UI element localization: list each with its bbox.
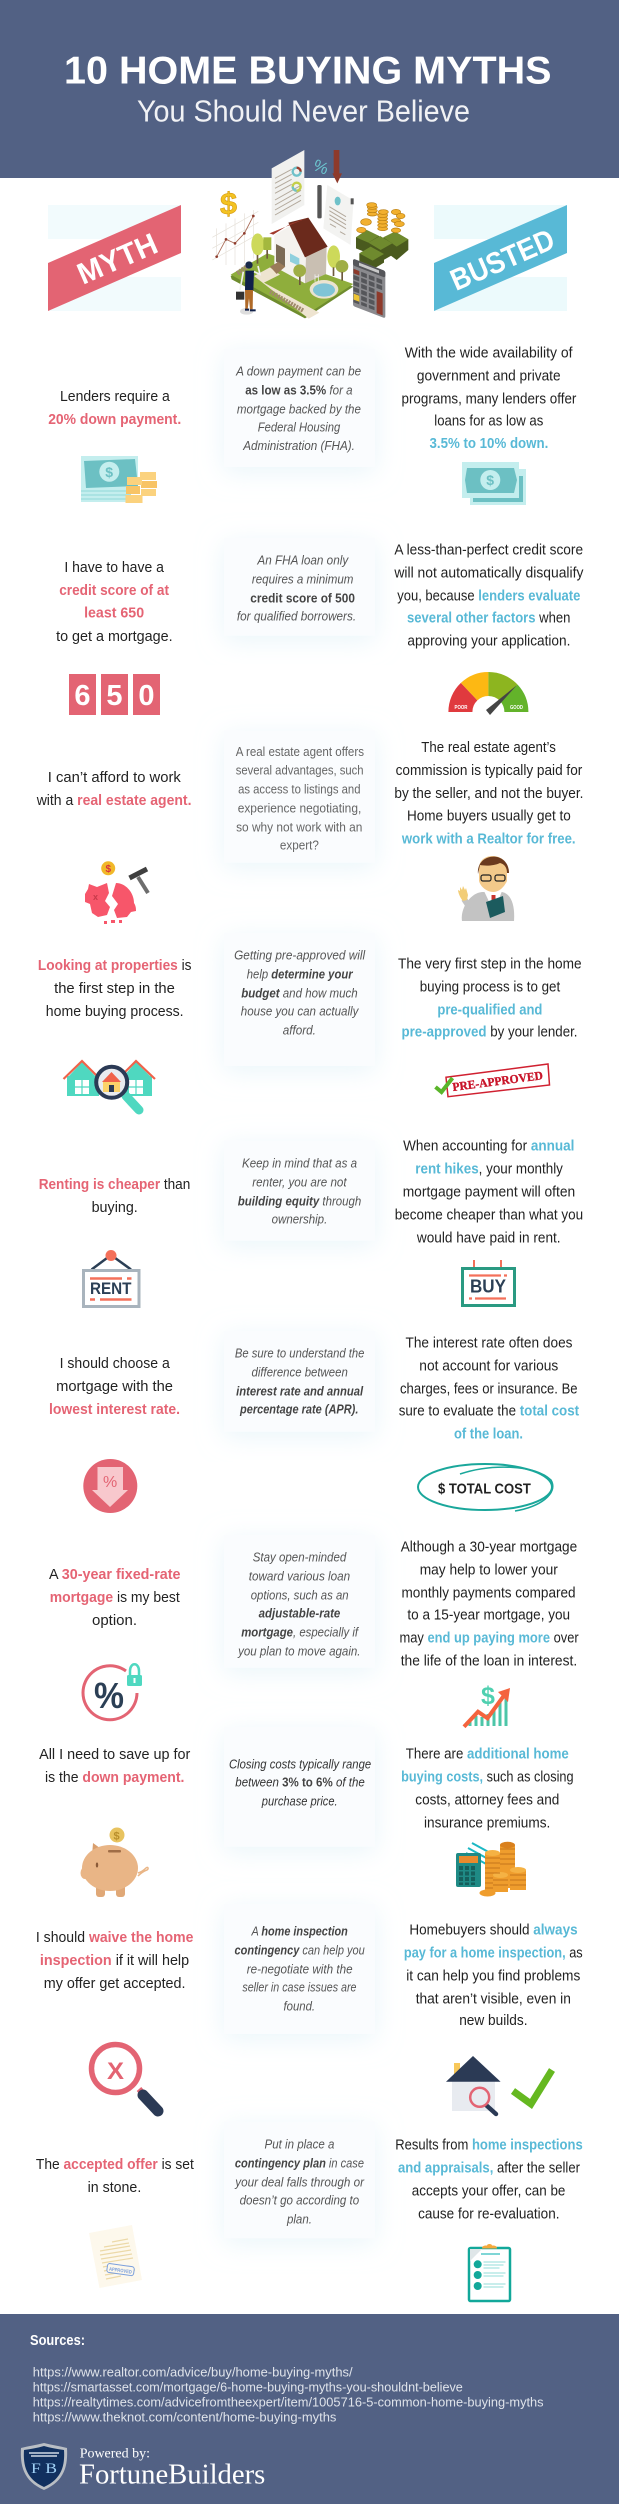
card 9: contingency can help you bbox=[234, 1943, 365, 1957]
icon: piggy bank: $ bbox=[114, 1830, 120, 1842]
busted 7 text bbox=[400, 1538, 579, 1669]
row 1 bbox=[48, 344, 576, 505]
icon: cash and coins: $ bbox=[105, 464, 113, 480]
row 10 bbox=[36, 2122, 583, 2301]
card 1: mortgage backed by the bbox=[237, 402, 361, 416]
icon: piggy bank bbox=[80, 1828, 148, 1897]
card 9: seller in case issues are bbox=[242, 1980, 357, 1994]
sources list: https://realtytimes.com/advicefromtheexpert/item/1005716-5-common-home-buying-myths bbox=[33, 2395, 544, 2410]
busted 7 text: monthly payments compared bbox=[402, 1584, 576, 1601]
busted 8 text: There are additional home bbox=[406, 1745, 569, 1762]
myth 4 text: Looking at properties is bbox=[38, 957, 192, 974]
busted 6 text: sure to evaluate the total cost bbox=[399, 1402, 579, 1419]
myth 8 text: All I need to save up for bbox=[39, 1746, 190, 1763]
icon: magnifier with x bbox=[92, 2044, 158, 2111]
card 2: requires a minimum bbox=[252, 572, 353, 586]
busted 7 text: Although a 30-year mortgage bbox=[401, 1538, 577, 1555]
house illustration bbox=[212, 150, 408, 319]
myth 2 text: to get a mortgage. bbox=[56, 628, 173, 645]
myth 2 text bbox=[56, 559, 173, 645]
card 8: purchase price. bbox=[261, 1794, 338, 1808]
busted 9 text: Homebuyers should always bbox=[409, 1921, 578, 1938]
busted label bbox=[434, 205, 567, 311]
busted 1 text: programs, many lenders offer bbox=[402, 390, 576, 407]
card 9: re-negotiate with the bbox=[247, 1962, 353, 1976]
myth 3 text: I can’t afford to work bbox=[48, 769, 181, 786]
myth 9 text bbox=[36, 1929, 193, 1992]
row 7 bbox=[49, 1535, 579, 1727]
card 3: expert? bbox=[280, 838, 319, 852]
myth 5 text: Renting is cheaper than bbox=[39, 1176, 190, 1193]
busted 6 text: charges, fees or insurance. Be bbox=[400, 1380, 578, 1397]
myth 1 text bbox=[48, 388, 181, 428]
busted 6 text bbox=[399, 1334, 579, 1442]
busted 4 text: pre-qualified and bbox=[437, 1001, 542, 1018]
myth 4 text: home buying process. bbox=[46, 1003, 184, 1020]
busted 8 text: costs, attorney fees and bbox=[415, 1791, 559, 1808]
busted 7 text: the life of the loan in interest. bbox=[401, 1652, 577, 1669]
card 5: ownership. bbox=[272, 1212, 327, 1226]
card 3: A real estate agent offers bbox=[236, 745, 364, 759]
myth 7 text: option. bbox=[92, 1612, 137, 1629]
busted 10 text: accepts your offer, can be bbox=[412, 2182, 565, 2199]
icon: rent sign: RENT bbox=[90, 1280, 132, 1298]
subtitle: You Should Never Believe bbox=[137, 94, 470, 129]
card 5: renter, you are not bbox=[252, 1175, 347, 1189]
card 2: credit score of 500 bbox=[250, 591, 355, 605]
busted 2 text bbox=[393, 541, 584, 649]
card 10 bbox=[224, 2122, 375, 2238]
busted 10 text bbox=[395, 2136, 583, 2222]
busted 8 text: insurance premiums. bbox=[424, 1814, 550, 1831]
card 9 bbox=[224, 1904, 375, 2034]
card 6 bbox=[224, 1331, 375, 1432]
card 5: Keep in mind that as a bbox=[242, 1156, 357, 1170]
icon: buy sign: BUY bbox=[470, 1277, 506, 1297]
icon: approved document bbox=[89, 2225, 142, 2288]
myth label bbox=[48, 205, 181, 311]
busted 3 text: by the seller, and not the buyer. bbox=[394, 785, 583, 802]
card 2 bbox=[224, 538, 375, 636]
myth 10 text: The accepted offer is set bbox=[36, 2156, 195, 2173]
busted 2 text: several other factors when bbox=[407, 609, 570, 626]
busted 5 text: rent hikes, your monthly bbox=[415, 1160, 563, 1177]
card 4: budget and how much bbox=[241, 986, 358, 1000]
myth 8 text bbox=[39, 1746, 190, 1786]
card 3 bbox=[224, 731, 375, 863]
icon: approved document: APPROVED bbox=[109, 2266, 132, 2276]
icon: total cost scribble bbox=[418, 1464, 553, 1511]
card 3: several advantages, such bbox=[236, 763, 364, 777]
busted 9 text: pay for a home inspection, as bbox=[404, 1944, 583, 1961]
logo wordmark: FortuneBuilders bbox=[79, 2459, 265, 2490]
busted 6 text: The interest rate often does bbox=[406, 1334, 572, 1351]
busted 10 text: cause for re-evaluation. bbox=[418, 2205, 560, 2222]
card 6: difference between bbox=[252, 1365, 348, 1379]
myth 5 text bbox=[39, 1176, 190, 1216]
icon: credit gauge bbox=[448, 672, 528, 715]
card 7 bbox=[224, 1535, 375, 1668]
icon: buy sign bbox=[462, 1260, 514, 1306]
icon: broken piggy bank: x bbox=[93, 892, 98, 902]
icon: broken piggy bank: $ bbox=[106, 864, 112, 875]
busted 1 text bbox=[402, 344, 576, 452]
sources list: https://www.theknot.com/content/home-buying-myths bbox=[33, 2410, 337, 2425]
icon: 650 score tiles: 5 bbox=[106, 680, 123, 712]
card 10: contingency plan in case bbox=[235, 2156, 364, 2170]
myth 2 text: least 650 bbox=[84, 605, 144, 622]
card 4 bbox=[224, 933, 375, 1066]
card 7: options, such as an bbox=[251, 1588, 349, 1602]
card 2: for qualified borrowers. bbox=[237, 609, 356, 623]
header banner bbox=[0, 0, 619, 178]
myth 4 text: the first step in the bbox=[54, 980, 175, 997]
card 3: as access to listings and bbox=[238, 782, 361, 796]
myth 9 text: my offer get accepted. bbox=[44, 1975, 185, 1992]
myth 4 text bbox=[38, 957, 192, 1020]
myth 3 text: with a real estate agent. bbox=[36, 792, 192, 809]
icon: percent with lock: % bbox=[94, 1675, 124, 1716]
icon: checklist clipboard bbox=[469, 2244, 510, 2301]
card 4: afford. bbox=[283, 1023, 316, 1037]
card 1 bbox=[224, 349, 375, 467]
busted 3 text: Home buyers usually get to bbox=[407, 807, 571, 824]
logo wordmark: Powered by: bbox=[80, 2446, 150, 2461]
icon: magnifier with x: X bbox=[107, 2058, 124, 2085]
busted 2 text: A less-than-perfect credit score bbox=[394, 541, 583, 558]
busted 7 text: to a 15-year mortgage, you bbox=[407, 1606, 570, 1623]
busted 9 text: new builds. bbox=[459, 2012, 528, 2029]
busted 8 text: buying costs, such as closing bbox=[401, 1768, 574, 1785]
card 7: toward various loan bbox=[249, 1569, 350, 1583]
busted 4 text bbox=[398, 955, 582, 1040]
busted 2 text: approving your application. bbox=[407, 632, 570, 649]
icon: percent with lock bbox=[83, 1664, 142, 1720]
card 10: your deal falls through or bbox=[234, 2175, 365, 2189]
myth 5 text: buying. bbox=[92, 1199, 138, 1216]
row 2 bbox=[56, 538, 584, 715]
busted 3 text: work with a Realtor for free. bbox=[401, 830, 576, 847]
house illustration: $ bbox=[220, 185, 237, 222]
icon: 650 score tiles: 0 bbox=[138, 680, 155, 712]
myth label: MYTH bbox=[73, 227, 163, 291]
myth 3 text bbox=[36, 769, 192, 809]
card 10: doesn’t go according to bbox=[240, 2193, 359, 2207]
icon: rent sign bbox=[84, 1250, 139, 1306]
myth 9 text: inspection if it will help bbox=[40, 1952, 189, 1969]
card 4: Getting pre-approved will bbox=[234, 948, 366, 962]
title: 10 HOME BUYING MYTHS bbox=[64, 50, 552, 92]
card 1: Federal Housing bbox=[258, 420, 340, 434]
icon: houses under magnifier bbox=[64, 1061, 155, 1110]
card 6: percentage rate (APR). bbox=[239, 1402, 358, 1416]
card 4: help determine your bbox=[247, 967, 354, 981]
logo: fortunebuilders shield bbox=[21, 2443, 67, 2490]
card 9: found. bbox=[284, 1999, 315, 2013]
busted 10 text: Results from home inspections bbox=[395, 2136, 583, 2153]
icon: rising dollar chart: $ bbox=[481, 1682, 495, 1710]
card 2: An FHA loan only bbox=[256, 553, 349, 567]
row 6 bbox=[49, 1331, 579, 1513]
myth 9 text: I should waive the home bbox=[36, 1929, 193, 1946]
icon: down arrow percent bbox=[83, 1459, 137, 1513]
icon: total cost scribble: $ TOTAL COST bbox=[438, 1480, 531, 1497]
card 7: Stay open-minded bbox=[253, 1550, 347, 1564]
card 6: interest rate and annual bbox=[236, 1384, 364, 1398]
card 6: Be sure to understand the bbox=[235, 1346, 364, 1360]
busted 9 text bbox=[404, 1921, 583, 2029]
busted 3 text: commission is typically paid for bbox=[396, 762, 582, 779]
icon: rising dollar chart bbox=[464, 1682, 510, 1727]
row 8 bbox=[39, 1727, 574, 1897]
sources list: https://www.realtor.com/advice/buy/home-buying-myths/ bbox=[33, 2365, 353, 2380]
icon: credit gauge: GOOD bbox=[510, 705, 523, 711]
card 1: Administration (FHA). bbox=[242, 439, 355, 453]
myth 6 text: lowest interest rate. bbox=[49, 1401, 180, 1418]
busted 6 text: of the loan. bbox=[454, 1425, 523, 1442]
busted 8 text bbox=[401, 1745, 574, 1831]
myth 8 text: is the down payment. bbox=[45, 1769, 184, 1786]
myth 10 text bbox=[36, 2156, 195, 2196]
card 7: adjustable-rate bbox=[259, 1606, 340, 1620]
house illustration: % bbox=[311, 155, 332, 179]
card 9: A home inspection bbox=[251, 1924, 348, 1938]
card 5: building equity through bbox=[238, 1194, 361, 1208]
icon: down arrow percent: % bbox=[103, 1474, 117, 1491]
myth 6 text bbox=[49, 1355, 180, 1418]
busted 7 text: may end up paying more over bbox=[400, 1629, 579, 1646]
busted 4 text: The very first step in the home bbox=[398, 955, 582, 972]
card 3: experience negotiating, bbox=[238, 801, 361, 815]
icon: house inspection check bbox=[446, 2056, 552, 2114]
card 8 bbox=[224, 1727, 375, 1847]
busted 1 text: loans for as low as bbox=[434, 413, 543, 430]
busted 4 text: buying process is to get bbox=[420, 978, 561, 995]
busted 1 text: With the wide availability of bbox=[405, 344, 573, 361]
icon: calculator and coin stacks bbox=[456, 1842, 526, 1896]
busted 1 text: government and private bbox=[417, 367, 561, 384]
busted 9 text: it can help you find problems bbox=[406, 1967, 580, 1984]
row 4 bbox=[38, 933, 582, 1110]
icon: real estate agent bbox=[458, 856, 514, 921]
busted 5 text: When accounting for annual bbox=[403, 1137, 574, 1154]
card 1: as low as 3.5% for a bbox=[245, 383, 353, 397]
card 8: between 3% to 6% of the bbox=[235, 1775, 365, 1789]
busted 4 text: pre-approved by your lender. bbox=[402, 1023, 578, 1040]
myth 6 text: I should choose a bbox=[60, 1355, 170, 1372]
sources heading: Sources: bbox=[30, 2332, 85, 2349]
busted 5 text bbox=[395, 1137, 583, 1246]
sources list bbox=[33, 2365, 544, 2425]
busted 5 text: would have paid in rent. bbox=[416, 1229, 561, 1246]
icon: 650 score tiles: 6 bbox=[74, 680, 91, 712]
footer band bbox=[0, 2314, 619, 2504]
icon: pre-approved stamp: PRE-APPROVED bbox=[452, 1068, 544, 1094]
busted 2 text: will not automatically disqualify bbox=[393, 564, 584, 581]
icon: 650 score tiles bbox=[69, 674, 160, 715]
card 8: Closing costs typically range bbox=[229, 1757, 371, 1771]
busted label: BUSTED bbox=[446, 223, 560, 298]
myth 1 text: Lenders require a bbox=[60, 388, 170, 405]
sources list: https://smartasset.com/mortgage/6-home-buying-myths-you-shouldnt-believe bbox=[33, 2380, 463, 2395]
myth 7 text: mortgage is my best bbox=[50, 1589, 180, 1606]
card 1: A down payment can be bbox=[235, 364, 361, 378]
card 4: house you can actually bbox=[241, 1004, 359, 1018]
busted 5 text: mortgage payment will often bbox=[403, 1183, 575, 1200]
icon: cash bills: $ bbox=[486, 472, 494, 488]
card 5 bbox=[224, 1141, 375, 1241]
icon: cash and coins bbox=[81, 456, 157, 503]
icon: broken piggy bank bbox=[85, 861, 148, 924]
myth 1 text: 20% down payment. bbox=[48, 411, 181, 428]
card 10: plan. bbox=[286, 2212, 312, 2226]
row 9 bbox=[36, 1904, 583, 2114]
busted 2 text: you, because lenders evaluate bbox=[397, 587, 580, 604]
icon: cash bills bbox=[462, 462, 526, 505]
card 7: you plan to move again. bbox=[237, 1644, 360, 1658]
busted 5 text: become cheaper than what you bbox=[395, 1206, 583, 1223]
busted 3 text: The real estate agent’s bbox=[421, 739, 556, 756]
myth 2 text: I have to have a bbox=[64, 559, 165, 576]
busted 6 text: not account for various bbox=[419, 1357, 558, 1374]
busted 7 text: may help to lower your bbox=[420, 1561, 558, 1578]
icon: pre-approved stamp bbox=[436, 1064, 550, 1097]
busted 9 text: that aren’t visible, even in bbox=[416, 1990, 571, 2007]
busted 3 text bbox=[394, 739, 583, 847]
busted 1 text: 3.5% to 10% down. bbox=[430, 435, 548, 452]
logo wordmark bbox=[79, 2446, 265, 2490]
card 10: Put in place a bbox=[264, 2137, 334, 2151]
row 5 bbox=[39, 1137, 583, 1306]
card 3: so why not work with an bbox=[236, 820, 362, 834]
row 3 bbox=[36, 731, 583, 924]
icon: credit gauge: POOR bbox=[454, 705, 468, 711]
busted 10 text: and appraisals, after the seller bbox=[398, 2159, 580, 2176]
myth 2 text: credit score of at bbox=[59, 582, 169, 599]
myth 6 text: mortgage with the bbox=[56, 1378, 173, 1395]
myth 7 text bbox=[49, 1566, 180, 1629]
logo: fortunebuilders shield: F B bbox=[31, 2461, 57, 2477]
card 7: mortgage, especially if bbox=[241, 1625, 359, 1639]
myth 7 text: A 30-year fixed-rate bbox=[49, 1566, 180, 1583]
myth 10 text: in stone. bbox=[88, 2179, 141, 2196]
